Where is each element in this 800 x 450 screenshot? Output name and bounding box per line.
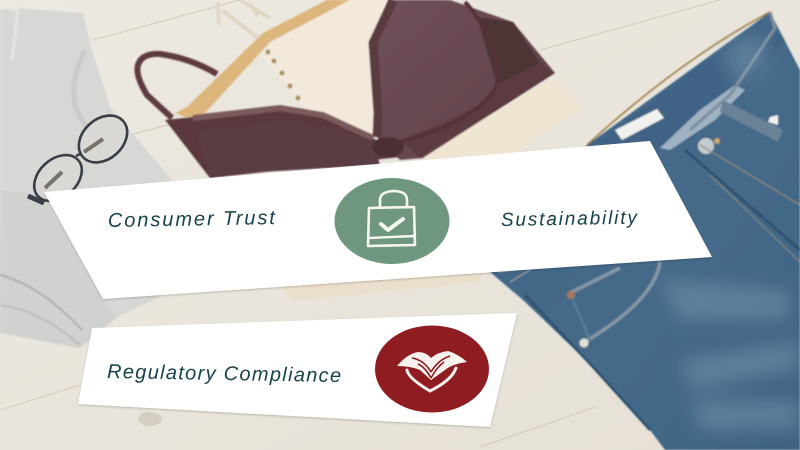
- belt loop: [720, 100, 783, 142]
- pocket: [570, 262, 660, 343]
- label: Sustainability: Sustainability: [501, 208, 639, 231]
- knot: [372, 137, 404, 157]
- fly seams: [685, 150, 800, 250]
- panel: consumer trust and sustainability banner: [44, 141, 712, 299]
- cream panels: [263, 0, 387, 136]
- panel: regulatory compliance banner: [78, 313, 517, 427]
- strap: [137, 54, 217, 118]
- waistband seam: [587, 12, 770, 145]
- garment: bra: [137, 0, 583, 301]
- label: Consumer Trust: Consumer Trust: [108, 207, 276, 232]
- banner shape: [78, 313, 517, 427]
- right cup: [373, 0, 555, 160]
- sweater: [0, 8, 190, 348]
- jeans: [490, 12, 800, 450]
- wooden strip: [175, 0, 350, 120]
- button: [698, 138, 714, 154]
- tassels: [218, 0, 270, 38]
- icon: shopping bag with check: [334, 178, 450, 264]
- left cup: [165, 108, 400, 178]
- snaps: [265, 49, 301, 101]
- banner shape: [44, 141, 712, 299]
- label: Regulatory Compliance: Regulatory Compliance: [107, 361, 341, 387]
- icon: heart with wings: [375, 326, 489, 412]
- label tag: [615, 109, 664, 140]
- fading: [660, 30, 800, 430]
- waistband interior: [595, 20, 785, 150]
- glasses: [25, 106, 136, 210]
- side seam: [525, 295, 650, 430]
